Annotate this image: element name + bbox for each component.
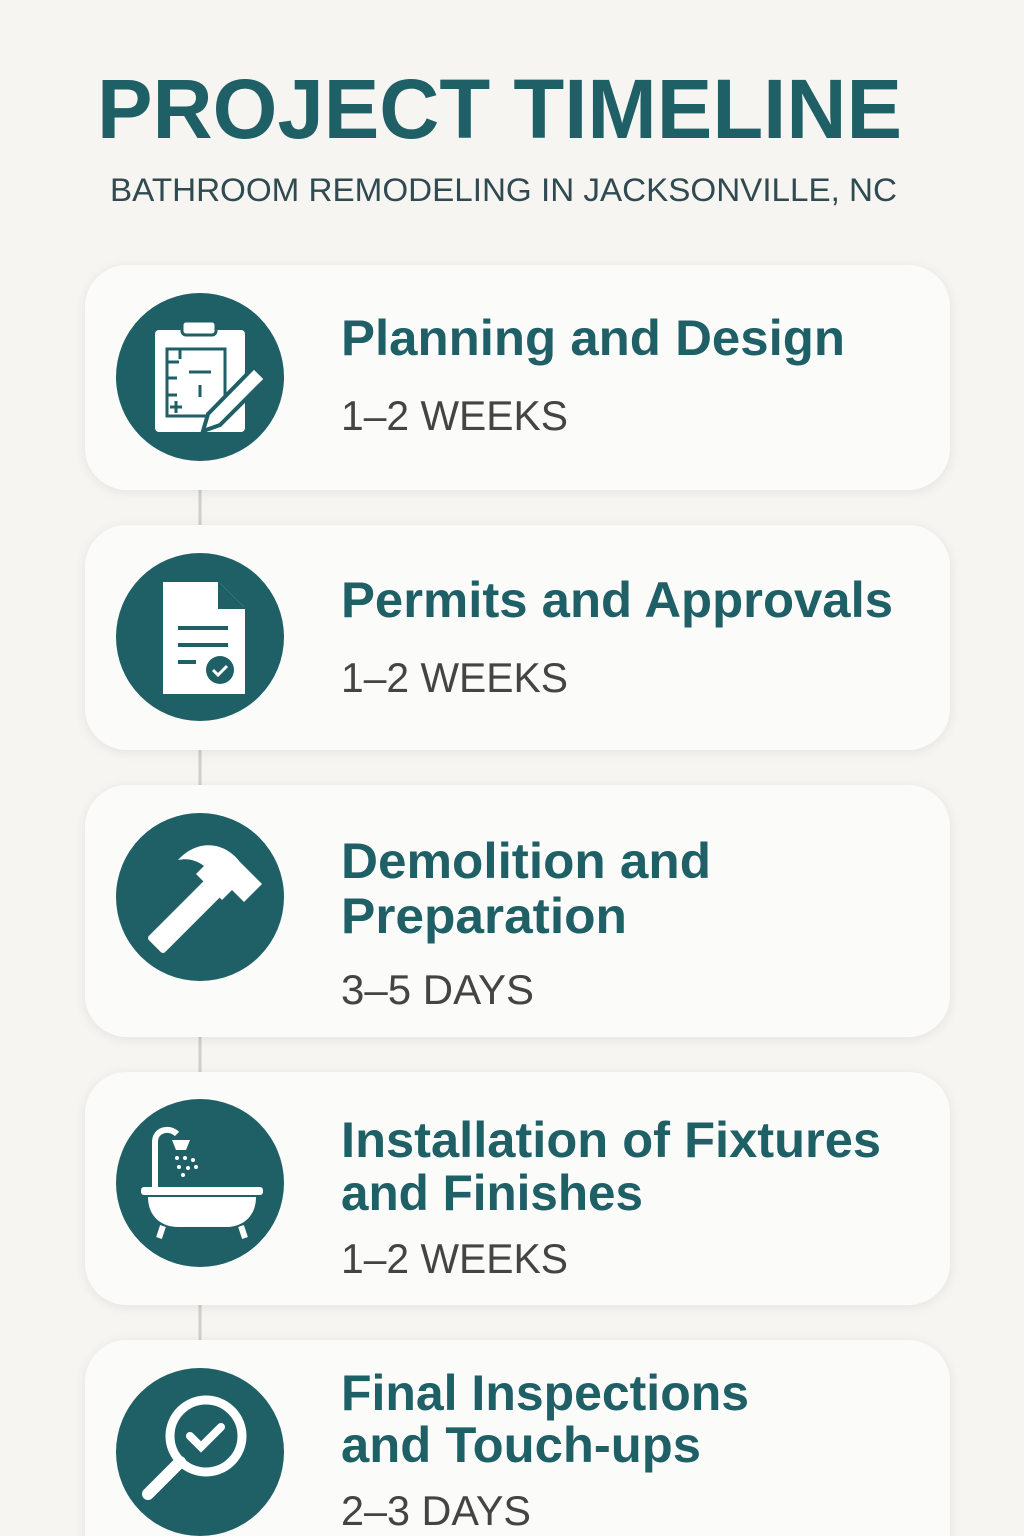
panel: installation xyxy=(85,1072,950,1305)
duration: 1–2 WEEKS xyxy=(341,654,568,701)
panel: demolition: Preparation xyxy=(341,888,627,944)
icon: bathtub xyxy=(116,1099,284,1267)
title: PROJECT TIMELINE xyxy=(97,62,902,156)
connectors xyxy=(198,490,202,1340)
panel: installation: and Finishes xyxy=(341,1165,643,1221)
duration: 3–5 DAYS xyxy=(341,966,534,1013)
heading: Planning and Design xyxy=(341,310,845,366)
duration: 1–2 WEEKS xyxy=(341,1235,568,1282)
panel: planning xyxy=(85,265,950,490)
heading: Final Inspections xyxy=(341,1365,749,1421)
subtitle: BATHROOM REMODELING IN JACKSONVILLE, NC xyxy=(110,172,897,208)
icon: hammer xyxy=(116,813,284,981)
panel: final inspection xyxy=(85,1340,950,1536)
duration: 2–3 DAYS xyxy=(341,1487,531,1534)
heading: Permits and Approvals xyxy=(341,572,893,628)
icon: document xyxy=(116,553,284,721)
icon: magnifier xyxy=(116,1368,284,1536)
heading: Installation of Fixtures xyxy=(341,1112,881,1168)
panel: demolition xyxy=(85,785,950,1037)
panel: final inspection: and Touch-ups xyxy=(341,1417,701,1473)
icon: clipboard xyxy=(116,293,284,461)
heading: Demolition and xyxy=(341,833,711,889)
panel: permits xyxy=(85,525,950,750)
duration: 1–2 WEEKS xyxy=(341,392,568,439)
